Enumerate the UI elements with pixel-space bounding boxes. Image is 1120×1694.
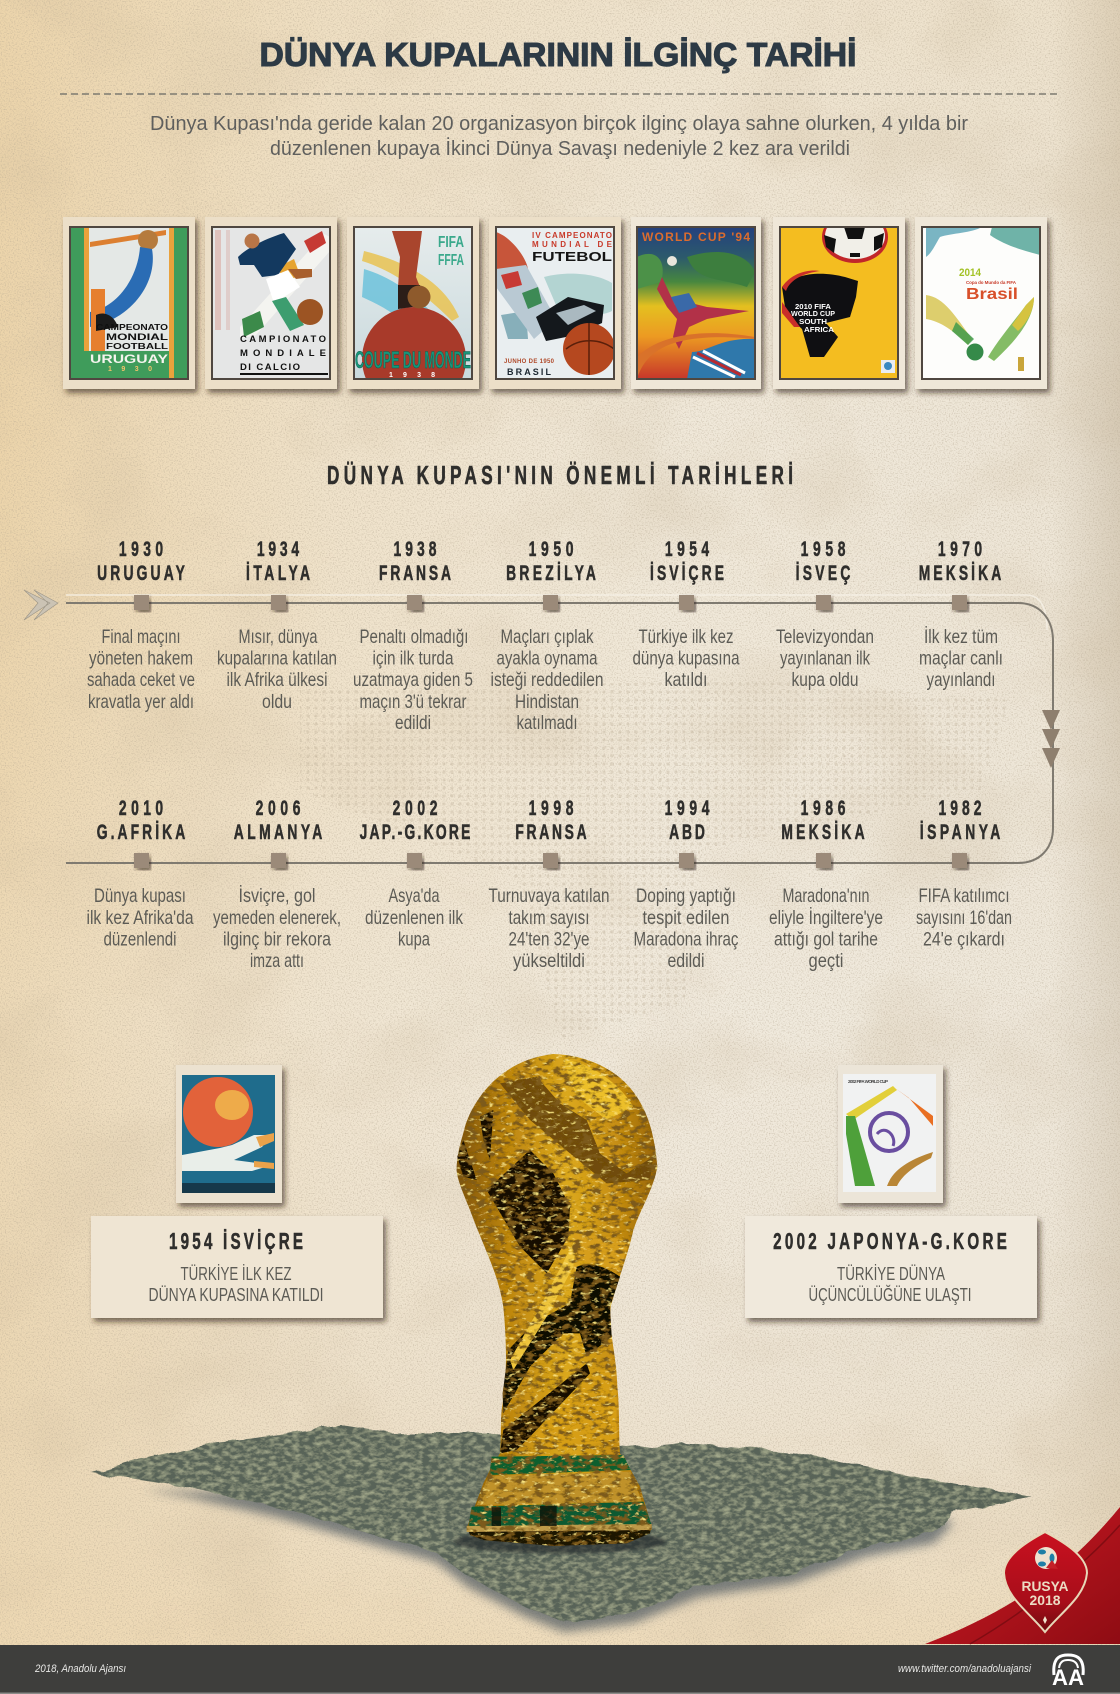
item: 1938 France [353,537,473,734]
item: 2006 Germany [213,796,341,972]
footer bar [0,1645,1120,1694]
item: 1950 Brazil: isteği reddedilen [490,669,604,691]
item: 1958 Sweden [776,537,874,691]
poster: 2002 small: 2002 FIFA WORLD CUP [848,1079,888,1084]
timeline items, top row [87,537,1003,734]
item: 1998 France: FRANSA [515,820,587,844]
item: 1970 Mexico: yayınlandı [926,669,996,691]
item: 1950 Brazil: Hindistan [515,691,579,713]
poster: 2002 small [838,1065,943,1203]
item: 1994 USA [634,796,739,972]
item: 1954 Switzerland: Türkiye ilk kez [638,626,734,648]
title: DÜNYA KUPALARININ İLGİNÇ TARİHİ [260,36,856,73]
item: 2002 Japan and South Korea: Asya'da [388,885,440,907]
social link: www.twitter.com/anadoluajansi [898,1663,1031,1675]
item: 1986 Mexico: Maradona'nın [782,885,870,907]
item: 2006 Germany: 2006 [256,796,301,820]
item: 1982 Spain: 24'e çıkardı [923,928,1005,950]
item: 1994 USA: Maradona ihraç [634,928,739,950]
item: 1986 Mexico: 1986 [801,796,846,820]
poster: 1934 Italy: DI CALCIO [240,362,300,373]
item: 2002 Japan and South Korea [360,796,471,950]
timeline items, bottom row [86,796,1012,972]
poster: 1950 Brazil: BRASIL [507,367,552,377]
item: 1982 Spain: 1982 [939,796,982,820]
item: 1938 France: Penaltı olmadığı [360,626,468,648]
item: 2002 Japan and South Korea: 2002 [393,796,438,820]
poster: 1934 Italy: MONDIALE [240,348,326,359]
rock ground [92,1425,1033,1632]
badge: Rusya 2018: RUSYA [1022,1579,1069,1594]
item: 1934 Italy: ilk Afrika ülkesi [226,669,328,691]
item: 1954 Switzerland: 1954 [665,537,709,561]
poster: 1938 France [347,217,479,411]
poster: 2014 Brazil: Brasil [966,286,1018,303]
item: 2002 Japan and South Korea: düzenlenen ilk [365,907,463,929]
poster: 1950 Brazil: MUNDIAL DE [532,240,613,249]
poster: 1938 France: FFFA [438,252,464,269]
item: 2006 Germany: yemeden elenerek, [213,907,341,929]
item: 1930 Uruguay: URUGUAY [97,561,185,585]
item: 1986 Mexico [769,796,883,972]
item: 1982 Spain: İSPANYA [920,820,1000,844]
item: 1970 Mexico: maçlar canlı [919,648,1003,670]
poster: 1930 Uruguay: FOOTBALL [106,342,168,351]
item: 1930 Uruguay: 1930 [119,537,163,561]
item: 1982 Spain [916,796,1012,950]
item: 1994 USA: ABD [669,820,705,844]
item: 1998 France: yükseltildi [513,950,585,972]
callout: 1954 Switzerland [91,1065,383,1318]
poster: 2010 South Africa: 2010 FIFA [795,302,832,311]
poster: 2014 Brazil: 2014 [959,267,982,279]
item: 2010 South Africa: Dünya kupası [94,885,186,907]
poster: 1938 France: COUPE DU MONDE [355,347,471,374]
item: 1930 Uruguay: sahada ceket ve [87,669,195,691]
poster: 2010 South Africa [773,211,905,389]
poster: 1950 Brazil [489,217,621,389]
poster: 1930 Uruguay: MONDIAL [106,332,169,342]
poster: 1930 Uruguay: CAMPEONATO [96,322,168,332]
item: 1950 Brazil: ayakla oynama [496,648,598,670]
item: 1954 Switzerland [632,537,740,691]
panel: 1954 text box [91,1216,383,1318]
item: 1938 France: uzatmaya giden 5 [353,669,473,691]
item: 1950 Brazil: katılmadı [516,712,578,734]
item: 1950 Brazil: Maçları çıplak [500,626,594,648]
panel: 2002 text box: ÜÇÜNCÜLÜĞÜNE ULAŞTI [808,1284,972,1305]
item: 1982 Spain: sayısını 16'dan [916,907,1012,929]
item: 1938 France: maçın 3'ü tekrar [360,691,467,713]
item: 1986 Mexico: MEKSİKA [781,820,865,844]
item: 1954 Switzerland: katıldı [664,669,708,691]
icon: tournament emblem [1035,1547,1058,1569]
item: 1982 Spain: FIFA katılımcı [918,885,1010,907]
poster: 1930 Uruguay: URUGUAY [90,352,168,366]
panel: 2002 text box [745,1216,1037,1318]
item: 1954 Switzerland: İSVİÇRE [650,561,724,585]
poster: 1930 Uruguay: 1930 [108,366,152,373]
item: 1986 Mexico: attığı gol tarihe [774,928,878,950]
item: 1934 Italy [217,537,337,713]
item: 1958 Sweden: kupa oldu [792,669,858,691]
callout: 2002 Japan and South Korea [745,1065,1037,1318]
poster: 2010 South Africa: SOUTH [799,317,827,326]
item: 2002 Japan and South Korea: kupa [398,928,430,950]
badge: Rusya 2018 [1004,1532,1087,1632]
item: 1970 Mexico: 1970 [938,537,982,561]
timeline path with arrows [24,590,1060,863]
poster: 1938 France: FIFA [438,234,464,251]
item: 2010 South Africa [86,796,194,950]
item: 1950 Brazil [490,537,604,734]
item: 1970 Mexico: MEKSİKA [919,561,1001,585]
panel: 1954 text box: DÜNYA KUPASINA KATILDI [148,1284,324,1305]
item: 2006 Germany: ilginç bir rekora [223,928,331,950]
poster: 2014 Brazil [915,217,1047,389]
intro text [150,113,968,160]
icon: World Cup trophy [453,1054,667,1554]
item: 1938 France: 1938 [394,537,437,561]
poster: 1950 Brazil: JUNHO DE 1950 [504,359,555,365]
item: 1998 France: Turnuvaya katılan [488,885,610,907]
item: 1970 Mexico: İlk kez tüm [924,625,998,648]
credit text: 2018, Anadolu Ajansı [34,1663,126,1675]
poster: 1950 Brazil: IV CAMPEONATO [532,231,612,240]
item: 1934 Italy: Mısır, dünya [238,626,318,648]
item: 1930 Uruguay: Final maçını [102,626,180,648]
item: 1954 Switzerland: dünya kupasına [632,648,740,670]
item: 1938 France: FRANSA [379,561,451,585]
item: 1958 Sweden: yayınlanan ilk [780,648,870,670]
item: 1934 Italy: oldu [262,691,292,713]
item: 1994 USA: Doping yaptığı [636,885,736,907]
item: 1986 Mexico: geçti [808,950,844,972]
item: 2010 South Africa: ilk kez Afrika'da [86,907,194,929]
item: 1930 Uruguay: kravatla yer aldı [88,691,194,713]
item: 1938 France: edildi [395,712,431,734]
panel: 2002 text box: TÜRKİYE DÜNYA [837,1263,945,1284]
poster row [63,211,1047,411]
item: 1934 Italy: 1934 [257,537,299,561]
badge: Rusya 2018: 2018 [1030,1593,1061,1608]
item: 1998 France [488,796,610,972]
icon: down triangles [1042,710,1060,768]
poster: 1994 USA [631,217,761,389]
item: 1958 Sweden: Televizyondan [776,626,874,648]
item: 2006 Germany: imza attı [250,950,304,972]
item: 1938 France: için ilk turda [372,648,454,670]
item: 2010 South Africa: düzenlendi [104,928,176,950]
poster: 2010 South Africa: AFRICA [804,325,835,334]
item: 2010 South Africa: G.AFRİKA [97,820,185,844]
poster: 1934 Italy [205,217,337,389]
poster: 1930 Uruguay [63,217,195,389]
item: 1970 Mexico [919,537,1003,691]
item: 1950 Brazil: 1950 [529,537,574,561]
intro text: Dünya Kupası'nda geride kalan 20 organizasyon birçok ilginç olaya sahne olurken, 4 yılda bir [150,113,968,135]
icon: Anadolu Agency logo: AA [1052,1665,1084,1690]
item: 1930 Uruguay [87,537,195,713]
item: 2006 Germany: İsviçre, gol [238,884,316,907]
panel: 1954 text box: TÜRKİYE İLK KEZ [180,1263,292,1284]
intro text: düzenlenen kupaya İkinci Dünya Savaşı nedeniyle 2 kez ara verildi [270,137,850,160]
poster: 1950 Brazil: FUTEBOL [532,249,612,264]
item: 1934 Italy: kupalarına katılan [217,648,337,670]
poster: 2010 South Africa: WORLD CUP [791,309,835,318]
section heading: DÜNYA KUPASI'NIN ÖNEMLİ TARİHLERİ [327,460,793,490]
item: 1958 Sweden: İSVEÇ [796,561,851,585]
item: 1994 USA: 1994 [665,796,710,820]
icon: start chevrons [24,590,58,620]
item: 1930 Uruguay: yöneten hakem [89,648,193,670]
item: 1986 Mexico: eliyle İngiltere'ye [769,906,883,929]
item: 1934 Italy: İTALYA [246,561,310,585]
item: 1998 France: 1998 [529,796,574,820]
item: 2010 South Africa: 2010 [119,796,163,820]
item: 1998 France: takım sayısı [508,907,590,929]
red corner ribbon [925,1507,1120,1644]
item: 1994 USA: tespit edilen [642,907,730,929]
item: 1994 USA: edildi [668,950,704,972]
poster: 1938 France: 1938 [389,372,435,379]
item: 2006 Germany: ALMANYA [234,820,322,844]
panel: 2002 text box: 2002 JAPONYA-G.KORE [773,1229,1007,1255]
item: 1998 France: 24'ten 32'ye [508,928,590,950]
poster: 1954 small [176,1065,282,1203]
item: 1958 Sweden: 1958 [801,537,846,561]
poster: 2014 Brazil: Copa do Mundo da FIFA [966,280,1017,285]
item: 1950 Brazil: BREZİLYA [506,561,596,585]
poster: 1994 USA: WORLD CUP '94 [642,230,750,244]
panel: 1954 text box: 1954 İSVİÇRE [169,1228,303,1255]
poster: 1934 Italy: CAMPIONATO [240,334,326,345]
item: 2002 Japan and South Korea: JAP.-G.KORE [360,820,471,844]
